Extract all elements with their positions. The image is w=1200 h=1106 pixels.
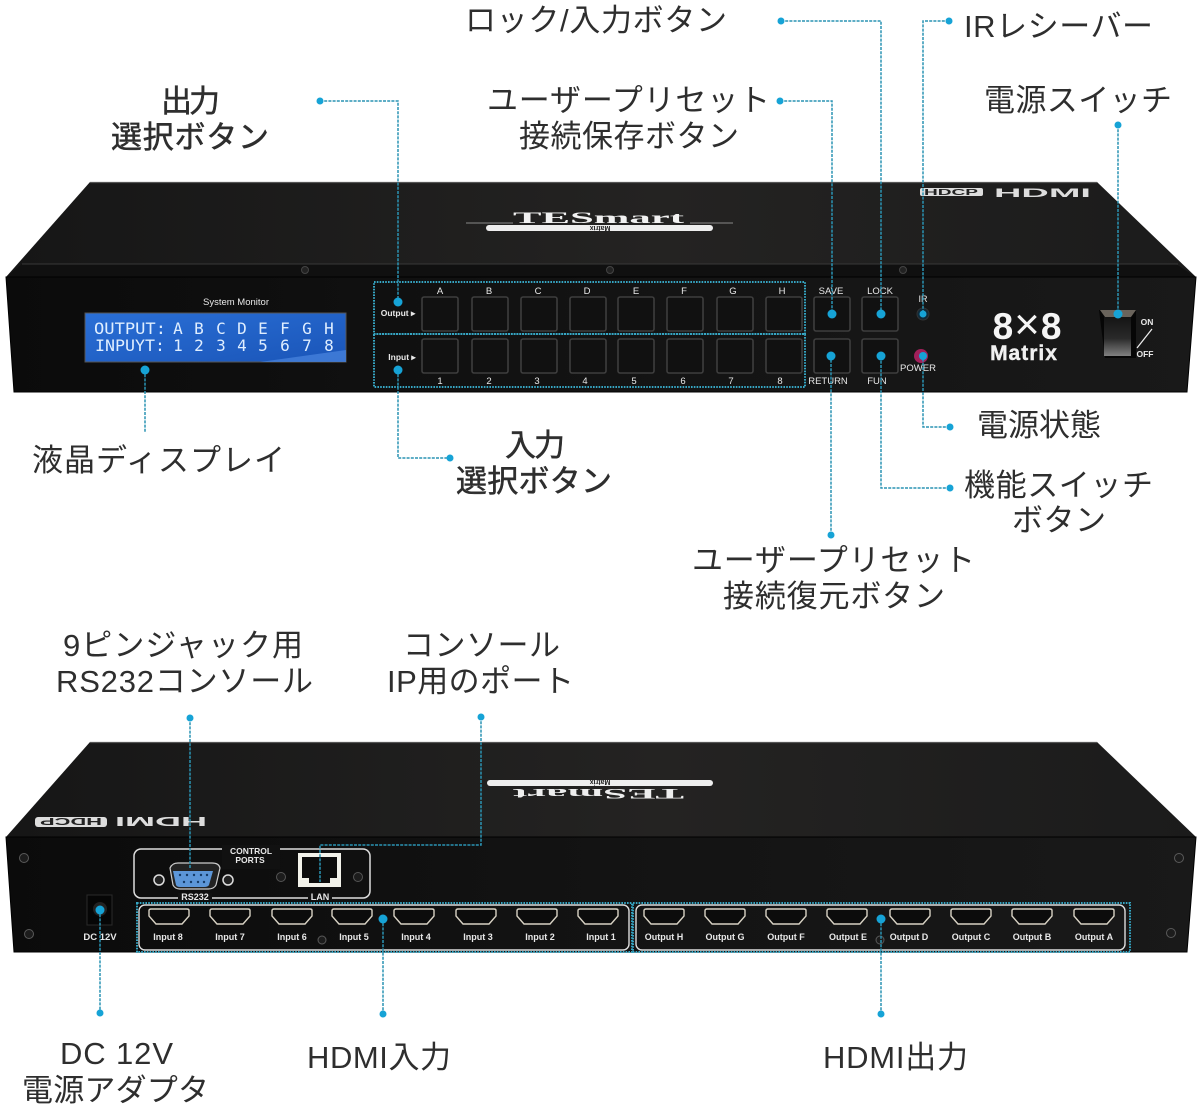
IR and power indicators — [900, 294, 936, 374]
control ports box: CONTROL — [230, 846, 272, 856]
HDMI output ports: Output E — [829, 932, 867, 942]
DC power jack — [83, 895, 117, 943]
callout: power status: 電源状態 — [977, 408, 1101, 443]
control ports box: RS232 — [181, 892, 209, 902]
callout: power status — [919, 352, 1101, 443]
HDMI output ports: Output A — [1075, 932, 1114, 942]
HDMI input ports: Input 3 — [463, 932, 493, 942]
callout: RS232 console: 9ピンジャック用 — [63, 628, 303, 663]
HDMI output ports: Output G — [706, 932, 744, 942]
input selection buttons: 8 — [777, 376, 783, 387]
callout: LCD display — [32, 366, 285, 478]
front device panel — [6, 182, 1196, 392]
callout: output select: 選択ボタン — [111, 120, 269, 155]
LCD display: 4 — [237, 336, 247, 355]
control ports box — [134, 845, 370, 902]
RS232 connector — [154, 863, 233, 889]
save lock return fun buttons — [808, 286, 898, 387]
input selection buttons: Input ▸ — [388, 352, 416, 362]
callout: lock and input button: ロック/入力ボタン — [465, 3, 727, 38]
callout: input select: 選択ボタン — [456, 464, 612, 499]
LCD display: 8 — [324, 336, 334, 355]
LCD display: H — [324, 319, 334, 338]
HDCP and HDMI logos: HDCP — [924, 188, 980, 197]
callout: function switch: 機能スイッチ — [964, 468, 1153, 503]
callout: HDMI output — [823, 914, 968, 1075]
callout: output select — [111, 84, 402, 306]
LCD display: 5 — [258, 336, 268, 355]
callout: save preset — [487, 83, 836, 318]
rear front face — [6, 837, 1196, 952]
system monitor label: System Monitor — [203, 297, 269, 308]
output selection buttons: A — [437, 286, 444, 297]
HDMI input ports: Input 7 — [215, 932, 245, 942]
save lock return fun buttons: SAVE — [819, 286, 843, 297]
HDCP and HDMI logos: HDMI — [994, 186, 1091, 200]
HDMI output ports: Output D — [890, 932, 929, 942]
mirrored TESmart logo — [487, 778, 713, 801]
callout: function switch: ボタン — [1012, 503, 1106, 538]
callout: LAN IP port: コンソール — [403, 628, 560, 663]
input selection buttons: 2 — [486, 376, 492, 387]
callout: restore preset — [692, 352, 975, 614]
callout: HDMI input — [307, 914, 451, 1075]
TESmart logo: TESmart — [513, 210, 686, 227]
input selection buttons: 6 — [680, 376, 686, 387]
output selection buttons: D — [584, 286, 591, 297]
button group outlines — [374, 282, 805, 387]
LCD display: 1 — [173, 336, 183, 355]
HDMI port group outlines — [137, 903, 1130, 952]
callout: lock and input button — [465, 3, 886, 318]
input selection buttons: 3 — [534, 376, 540, 387]
top face groove — [6, 182, 1196, 277]
callout: function switch — [876, 352, 1153, 538]
LCD display — [85, 313, 346, 362]
callout: IR receiver: IRレシーバー — [964, 9, 1153, 44]
rear top edge — [90, 742, 1097, 744]
callout: power switch: 電源スイッチ — [984, 83, 1172, 118]
callout: HDMI input: HDMI入力 — [307, 1040, 451, 1075]
HDMI input ports: Input 4 — [401, 932, 431, 942]
LCD display: D — [237, 319, 247, 338]
rocker power switch: ON — [1141, 317, 1153, 327]
rear HDCP and HDMI logos — [35, 814, 207, 829]
device top face — [6, 182, 1196, 277]
callout: LAN IP port: IP用のポート — [387, 664, 574, 699]
save lock return fun buttons: FUN — [867, 376, 887, 387]
callout: HDMI output: HDMI出力 — [823, 1040, 968, 1075]
HDMI output ports: Output F — [767, 932, 805, 942]
callout: DC 12V adapter: DC 12V — [60, 1036, 173, 1071]
callout: DC 12V adapter — [22, 906, 209, 1106]
HDCP and HDMI logos — [920, 186, 1091, 200]
rocker power switch: OFF — [1136, 349, 1154, 359]
HDMI output ports: Output H — [645, 932, 683, 942]
callout: RS232 console: RS232コンソール — [56, 664, 313, 699]
callout: input select: 入力 — [505, 428, 565, 463]
LAN connector — [276, 853, 362, 887]
LCD display: INPUYT: — [95, 336, 165, 355]
input selection buttons: 5 — [631, 376, 637, 387]
rear top face — [6, 742, 1196, 837]
callout: output select: 出力 — [161, 84, 220, 119]
output selection buttons: G — [729, 286, 737, 297]
rear HDCP and HDMI logos: HDMI — [115, 814, 207, 829]
rocker power switch — [1099, 310, 1154, 359]
8x8 matrix badge: 8×8 — [993, 300, 1061, 349]
input selection buttons: 7 — [728, 376, 734, 387]
input selection buttons: 1 — [437, 376, 443, 387]
callout: save preset: ユーザープリセット — [487, 83, 770, 118]
callout: input select — [394, 366, 612, 499]
LCD display: E — [258, 319, 268, 338]
8x8 matrix badge: Matrix — [990, 342, 1058, 365]
output selection buttons: E — [633, 286, 639, 297]
LCD display: OUTPUT: — [94, 319, 166, 338]
callout: LAN IP port — [320, 628, 574, 882]
HDMI output ports: Output C — [952, 932, 991, 942]
save lock return fun buttons: LOCK — [867, 286, 894, 297]
HDMI input ports — [139, 905, 629, 950]
device front face — [6, 277, 1196, 392]
HDMI input ports: Input 6 — [277, 932, 307, 942]
LCD display: A — [173, 319, 183, 338]
rear HDCP and HDMI logos: HDCP — [39, 815, 102, 826]
HDMI output ports — [636, 905, 1125, 950]
control ports box: PORTS — [235, 855, 265, 865]
IR and power indicators: IR — [918, 294, 928, 304]
mirrored TESmart logo: TESmart — [513, 785, 684, 801]
control ports box: LAN — [311, 892, 329, 902]
HDMI input ports: Input 8 — [153, 932, 183, 942]
LCD display: G — [302, 319, 312, 338]
callout: restore preset: 接続復元ボタン — [723, 579, 945, 614]
LCD display: F — [280, 319, 290, 338]
save lock return fun buttons: RETURN — [808, 376, 848, 387]
output selection buttons — [381, 286, 802, 331]
output selection buttons: B — [486, 286, 492, 297]
callout: restore preset: ユーザープリセット — [692, 543, 975, 578]
mirrored TESmart logo: Matrix — [590, 778, 610, 785]
callout: save preset: 接続保存ボタン — [519, 119, 739, 154]
output selection buttons: C — [535, 286, 542, 297]
input selection buttons: 4 — [582, 376, 588, 387]
callout: LCD display: 液晶ディスプレイ — [32, 443, 285, 478]
LCD display: C — [216, 319, 226, 338]
rear device panel — [6, 742, 1196, 952]
corner screws — [20, 854, 1184, 944]
output selection buttons: Output ▸ — [381, 308, 416, 318]
LCD display: 2 — [194, 336, 204, 355]
callout: power switch — [984, 83, 1172, 318]
output selection buttons: F — [681, 286, 687, 297]
TESmart logo — [466, 210, 733, 231]
callout: IR receiver — [920, 9, 1153, 318]
LCD display: 3 — [216, 336, 226, 355]
HDMI output ports: Output B — [1013, 932, 1052, 942]
output selection buttons: H — [779, 286, 786, 297]
LCD display: B — [194, 319, 204, 338]
callout: RS232 console — [56, 628, 313, 868]
HDMI input ports: Input 5 — [339, 932, 369, 942]
HDMI input ports: Input 1 — [586, 932, 616, 942]
HDMI input ports: Input 2 — [525, 932, 555, 942]
TESmart logo: Matrix — [590, 224, 610, 231]
LCD display: 6 — [280, 336, 290, 355]
LCD display: 7 — [302, 336, 312, 355]
IR and power indicators: POWER — [900, 363, 936, 374]
DC power jack: DC 12V — [83, 932, 117, 943]
input selection buttons — [388, 339, 802, 387]
